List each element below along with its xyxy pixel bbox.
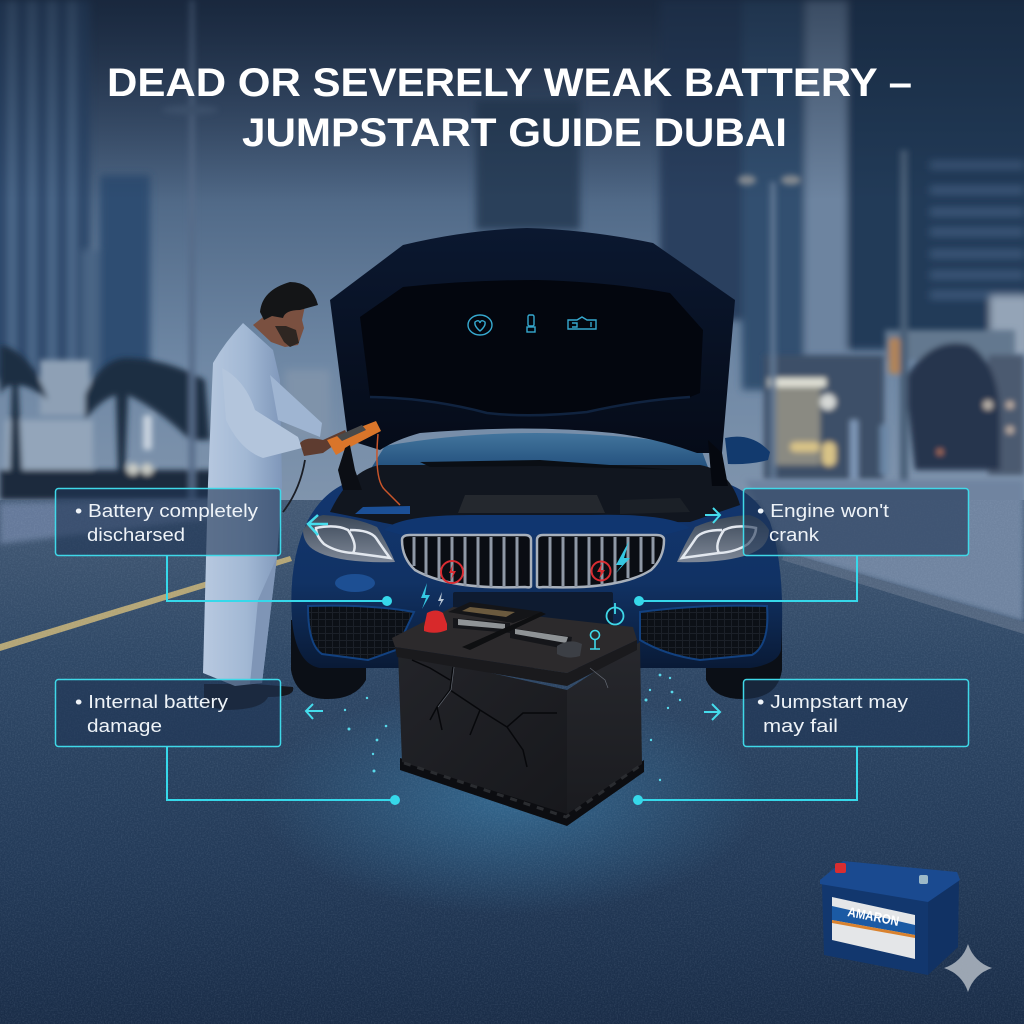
callout: jumpstart may fail	[744, 680, 968, 746]
connector: engine won't crank	[634, 556, 857, 606]
title	[107, 61, 912, 155]
battery: cracks	[412, 660, 557, 767]
callout: internal battery damage: damage	[87, 715, 162, 736]
icon: cyan bolt right	[615, 541, 630, 574]
hood strut	[708, 440, 728, 486]
technician	[203, 282, 400, 710]
arrow: lower left	[306, 704, 323, 719]
callout: internal battery damage: • Internal battery	[75, 691, 229, 712]
hero battery	[344, 602, 681, 826]
connector: battery completely discharsed	[167, 556, 392, 606]
callout: jumpstart may fail: may fail	[763, 715, 838, 736]
technician: hands	[300, 430, 348, 456]
car	[291, 433, 782, 699]
car: engine bay	[330, 465, 740, 525]
icon: cyan bolt left	[421, 583, 430, 609]
technician: overall	[203, 323, 282, 686]
Amaron: grey terminal	[919, 875, 928, 884]
Amaron: top	[820, 861, 960, 902]
icon: red warning left	[441, 561, 463, 583]
callout: engine won't crank: • Engine won't	[757, 500, 889, 521]
callout: engine won't crank: crank	[769, 524, 820, 545]
pale buildings and horizon	[5, 420, 93, 475]
palms	[0, 343, 1000, 470]
car: left lower intake	[308, 606, 414, 660]
Amaron: label: AMARON	[846, 904, 900, 929]
car: wipers	[420, 460, 680, 470]
car: windshield	[365, 433, 712, 478]
arrow: upper left	[308, 515, 328, 535]
technician: cable	[283, 460, 305, 512]
battery: top face	[392, 607, 637, 673]
car: body	[291, 478, 782, 668]
battery: lower ribs	[404, 763, 641, 817]
title: JUMPSTART GUIDE DUBAI	[242, 111, 787, 155]
technician: trouser shadow	[250, 557, 277, 684]
technician: head and neck	[253, 306, 305, 347]
car: right grille	[537, 535, 664, 587]
arrow: upper right	[705, 508, 720, 523]
arrows	[306, 508, 720, 720]
open hood	[330, 228, 735, 486]
battery: sparkle particles	[344, 674, 681, 781]
Amaron: front face	[822, 884, 928, 975]
orange diagnostic tablet	[327, 421, 400, 505]
connector lines	[167, 556, 857, 805]
car: left headlight	[303, 515, 395, 562]
technician: far sleeve	[270, 375, 322, 437]
poles	[189, 0, 195, 500]
battery: vent caps	[448, 602, 572, 650]
background: blurred Dubai street	[0, 0, 1024, 520]
icon: jump pack	[568, 317, 596, 329]
title: DEAD OR SEVERELY WEAK BATTERY –	[107, 61, 912, 105]
callout: battery completely discharsed	[56, 488, 280, 556]
connector: jumpstart may fail	[633, 746, 857, 805]
icon: battery key	[527, 315, 535, 332]
car: licence plate	[453, 592, 613, 632]
battery: right face	[567, 642, 642, 814]
callout: battery completely discharsed: • Battery completely	[75, 500, 259, 521]
callout: jumpstart may fail: • Jumpstart may	[757, 691, 909, 712]
battery: base skirt	[400, 758, 644, 826]
Amaron battery product image	[820, 861, 960, 975]
top shading behind title	[0, 0, 1024, 200]
icon: small white bolt	[438, 592, 444, 607]
car: mirror	[725, 437, 770, 464]
car: tyres	[291, 620, 782, 699]
connector: internal battery damage	[167, 746, 400, 805]
callout: battery completely discharsed: discharsed	[87, 524, 185, 545]
callout: engine won't crank	[744, 488, 968, 556]
car: right headlight	[677, 515, 769, 562]
sparkle logo	[944, 944, 992, 992]
warning and electric icons	[421, 541, 630, 649]
callout: internal battery damage	[56, 680, 280, 746]
icon: heart badge	[468, 315, 492, 335]
battery: red terminal	[424, 610, 447, 633]
car: paint reflection	[335, 574, 375, 592]
icon: small cyan ring	[590, 630, 600, 649]
Amaron: right face	[928, 878, 959, 975]
technician: shoes	[204, 684, 293, 710]
icon: power ring	[606, 603, 624, 624]
road surface	[0, 480, 1024, 1024]
technician: near sleeve	[222, 368, 302, 458]
street lights	[738, 175, 756, 185]
car: hood front edge	[384, 515, 690, 535]
arrow: lower right	[704, 704, 720, 720]
car: right lower intake	[640, 606, 767, 660]
Amaron: red terminal	[835, 863, 846, 873]
icon: red warning right	[592, 562, 610, 580]
battery: negative terminal	[557, 641, 582, 658]
car: left grille	[402, 535, 531, 587]
technician: hair	[260, 282, 318, 320]
technician: beard	[275, 326, 299, 347]
battery: front face	[398, 652, 567, 814]
